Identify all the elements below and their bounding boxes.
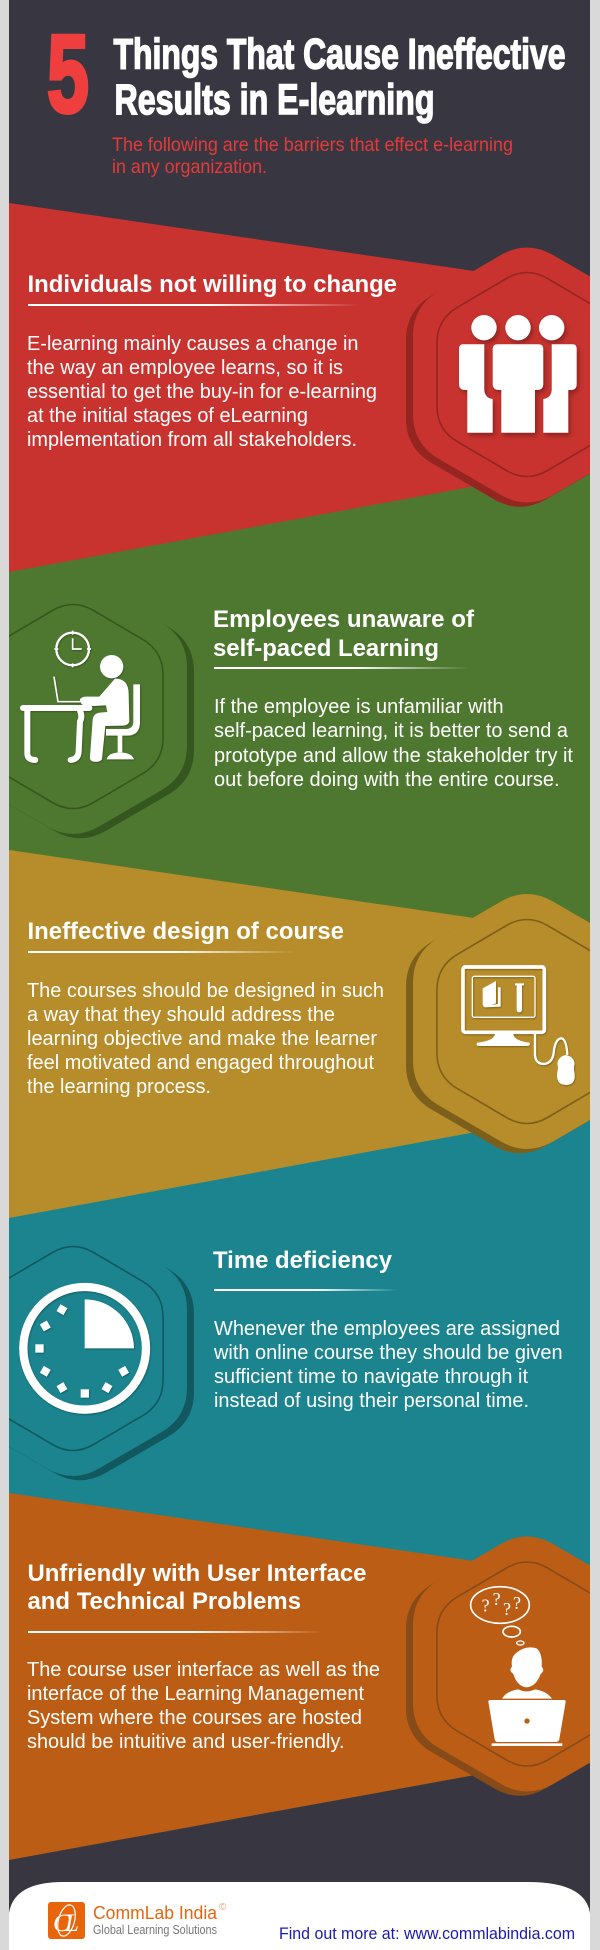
body text: a way that they should address the: [27, 1003, 335, 1026]
heading: Unfriendly with User Interface: [28, 1560, 366, 1587]
body text: learning objective and make the learner: [27, 1027, 377, 1050]
icon: clock with quarter segment: [23, 1287, 146, 1410]
body text: [27, 1658, 380, 1753]
heading: [213, 606, 475, 662]
panel: unfriendly user interface and technical problems: [9, 1493, 600, 1860]
title: Results in E-learning: [114, 76, 434, 124]
body text: System where the courses are hosted: [27, 1706, 362, 1729]
body text: the learning process.: [27, 1075, 211, 1098]
logo: CommLab India: Global Learning Solutions: [93, 1923, 217, 1937]
icon: confused user at laptop: ?: [482, 1596, 490, 1616]
body text: instead of using their personal time.: [214, 1389, 529, 1412]
heading rule: [214, 667, 469, 669]
hexagon badge: gold: [406, 894, 600, 1153]
logo: CommLab India: C: [53, 1910, 70, 1937]
body text: self-paced learning, it is better to send a: [214, 719, 569, 742]
title: [114, 30, 566, 124]
icon: confused user at laptop: ?: [513, 1593, 521, 1613]
header: numeral 5: 5: [47, 13, 89, 136]
body text: If the employee is unfamiliar with: [214, 695, 504, 718]
heading: Time deficiency: [213, 1247, 392, 1274]
icon: confused user at laptop: ?: [493, 1589, 501, 1609]
body text: feel motivated and engaged throughout: [27, 1051, 374, 1074]
icon: three people: [459, 315, 577, 433]
body text: [27, 979, 384, 1098]
body text: Whenever the employees are assigned: [214, 1317, 560, 1340]
subtitle: The following are the barriers that effect e-learning: [112, 134, 513, 156]
icon: confused user at laptop: [471, 1587, 566, 1746]
heading: Employees unaware of: [213, 606, 475, 633]
panel: time deficiency: [0, 1050, 590, 1600]
logo: CommLab India: L: [64, 1910, 79, 1937]
heading: and Technical Problems: [28, 1588, 301, 1615]
subtitle: in any organization.: [112, 156, 267, 178]
logo: CommLab India: [48, 1902, 227, 1939]
footer panel: [9, 1882, 590, 1950]
body text: The course user interface as well as the: [27, 1658, 380, 1681]
hexagon badge: orange: [406, 1536, 600, 1796]
logo: CommLab India: CommLab India: [93, 1902, 218, 1923]
body text: interface of the Learning Management: [27, 1682, 364, 1705]
body text: the way an employee learns, so it is: [27, 356, 343, 379]
body text: implementation from all stakeholders.: [27, 428, 357, 451]
panel: individuals not willing to change: [9, 203, 600, 572]
body text: [27, 332, 377, 451]
icon: employee at desk with clock: [20, 631, 140, 762]
body text: [214, 695, 573, 791]
body text: sufficient time to navigate through it: [214, 1365, 528, 1388]
footer link text: Find out more at: www.commlabindia.com: [279, 1925, 575, 1943]
heading: self-paced Learning: [213, 635, 439, 662]
heading rule: [28, 1631, 325, 1633]
hexagon badge: green: [0, 579, 194, 838]
heading: [28, 1560, 366, 1615]
heading rule: [28, 951, 295, 953]
body text: essential to get the buy-in for e-learning: [27, 380, 377, 403]
body text: out before doing with the entire course.: [214, 768, 560, 791]
icon: monitor with book, test tube and mouse: [463, 967, 575, 1085]
body text: prototype and allow the stakeholder try it: [214, 744, 573, 767]
panel: ineffective design of course: [9, 850, 600, 1218]
hexagon badge: red: [406, 248, 600, 507]
hexagon badge: teal: [0, 1221, 194, 1480]
body text: at the initial stages of eLearning: [27, 404, 308, 427]
icon: confused user at laptop: ?: [503, 1599, 511, 1619]
heading: Ineffective design of course: [28, 918, 344, 945]
heading rule: [214, 1289, 398, 1291]
body text: The courses should be designed in such: [27, 979, 384, 1002]
body text: [213, 1317, 563, 1412]
body text: E-learning mainly causes a change in: [27, 332, 358, 355]
subtitle: [112, 134, 513, 178]
heading rule: [28, 304, 360, 306]
panel: employees unaware of self-paced learning: [0, 400, 590, 950]
body text: with online course they should be given: [213, 1341, 563, 1364]
body text: should be intuitive and user-friendly.: [27, 1730, 344, 1753]
heading: Individuals not willing to change: [28, 271, 397, 298]
logo: CommLab India: ©: [219, 1902, 227, 1913]
